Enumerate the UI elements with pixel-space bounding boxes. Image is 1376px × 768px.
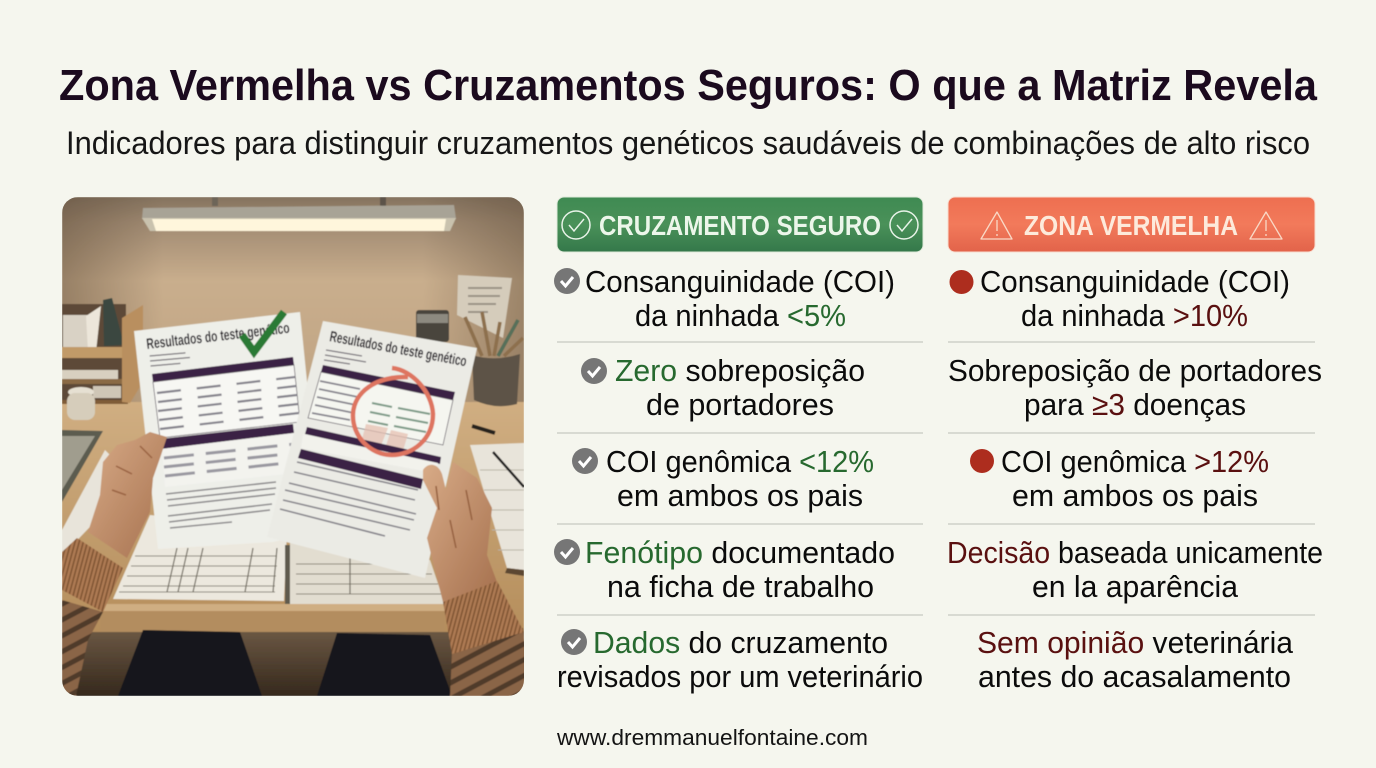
left hand xyxy=(88,432,167,558)
wall xyxy=(62,197,524,407)
item: genomic COI: em ambos os pais xyxy=(617,478,863,513)
icon: red dot xyxy=(950,270,974,294)
ceiling lamp xyxy=(142,197,456,231)
icon: red dot xyxy=(970,449,994,473)
item: phenotype: Fenótipo documentado xyxy=(585,535,895,570)
right sheet: red-zone result xyxy=(267,321,477,578)
pencil cup xyxy=(465,312,523,406)
icon: check xyxy=(554,268,580,294)
item: genomic COI: em ambos os pais xyxy=(1012,478,1258,513)
under-desk shadow xyxy=(62,632,524,696)
item: genomic COI xyxy=(970,444,1269,513)
icon: check xyxy=(581,358,607,384)
green check mark xyxy=(242,312,284,352)
right sheet: red-zone result: Resultados do teste genético xyxy=(328,328,468,370)
item: carrier overlap xyxy=(948,353,1322,422)
mug xyxy=(416,310,449,342)
left sheet: safe result xyxy=(134,312,322,549)
item: genomic COI: COI genômica <12% xyxy=(606,444,874,479)
item: vet review xyxy=(557,625,923,694)
icon: warning right xyxy=(1250,212,1282,239)
title: Zona Vermelha vs Cruzamentos Seguros: O que a Matriz Revela xyxy=(59,62,1318,110)
item: litter COI xyxy=(950,264,1290,333)
left sleeve xyxy=(62,538,123,696)
item: genomic COI: COI genômica >12% xyxy=(1001,444,1269,479)
icon: check xyxy=(561,629,587,655)
left shelf organiser xyxy=(62,298,143,404)
header: zona vermelha xyxy=(948,197,1315,252)
left sheet: safe result: Resultados do teste genético xyxy=(146,320,291,353)
header: cruzamento seguro: CRUZAMENTO SEGURO xyxy=(599,210,881,241)
item: carrier overlap: Zero sobreposição xyxy=(615,353,865,388)
item: no vet opinion: Sem opinião veterinária xyxy=(977,625,1294,660)
footer url: www.dremmanuelfontaine.com xyxy=(556,725,868,750)
item: vet review: revisados por um veterinário xyxy=(557,659,923,694)
item: litter COI: Consanguinidade (COI) xyxy=(980,264,1290,299)
item: carrier overlap: de portadores xyxy=(646,387,834,422)
item: appearance: en la aparência xyxy=(1032,569,1239,604)
icon: check circle left xyxy=(562,211,590,239)
header: zona vermelha: ZONA VERMELHA xyxy=(1024,210,1238,241)
white sheet under left arm xyxy=(62,450,110,552)
icon: warning left xyxy=(981,212,1012,239)
item: phenotype xyxy=(554,535,895,604)
item: appearance xyxy=(947,535,1323,604)
item: appearance: Decisão baseada unicamente xyxy=(947,535,1323,570)
icon: check xyxy=(554,539,580,565)
open workbook with table lines xyxy=(113,515,445,604)
subtitle: Indicadores para distinguir cruzamentos genéticos saudáveis de combinações de alto risco xyxy=(66,125,1310,161)
right sleeve xyxy=(443,581,530,696)
header: cruzamento seguro xyxy=(557,197,923,252)
photo: hands holding two genetic test result sheets at a desk xyxy=(62,197,530,696)
item: carrier overlap xyxy=(581,353,865,422)
item: genomic COI xyxy=(572,444,874,513)
item: litter COI xyxy=(554,264,895,333)
small jar xyxy=(67,387,95,420)
item: carrier overlap: Sobreposição de portadores xyxy=(948,353,1322,388)
icon: check xyxy=(572,448,598,474)
item: no vet opinion xyxy=(977,625,1294,694)
panel: red zone xyxy=(947,197,1323,694)
item: carrier overlap: para ≥3 doenças xyxy=(1024,387,1246,422)
side form on desk xyxy=(470,443,524,576)
item: litter COI: da ninhada <5% xyxy=(635,298,846,333)
item: litter COI: Consanguinidade (COI) xyxy=(585,264,895,299)
desk xyxy=(62,402,524,634)
desk front edge xyxy=(100,604,445,632)
tablet at desk edge xyxy=(62,430,103,502)
item: litter COI: da ninhada >10% xyxy=(1021,298,1248,333)
item: vet review: Dados do cruzamento xyxy=(593,625,888,660)
right hand xyxy=(423,462,497,602)
item: phenotype: na ficha de trabalho xyxy=(607,569,874,604)
legs xyxy=(118,630,452,696)
panel: safe crossing xyxy=(554,197,923,694)
dark pen on desk xyxy=(472,426,495,433)
item: no vet opinion: antes do acasalamento xyxy=(978,659,1291,694)
red circle annotation xyxy=(353,368,433,455)
icon: check circle right xyxy=(890,211,918,239)
pinned note xyxy=(457,275,512,338)
